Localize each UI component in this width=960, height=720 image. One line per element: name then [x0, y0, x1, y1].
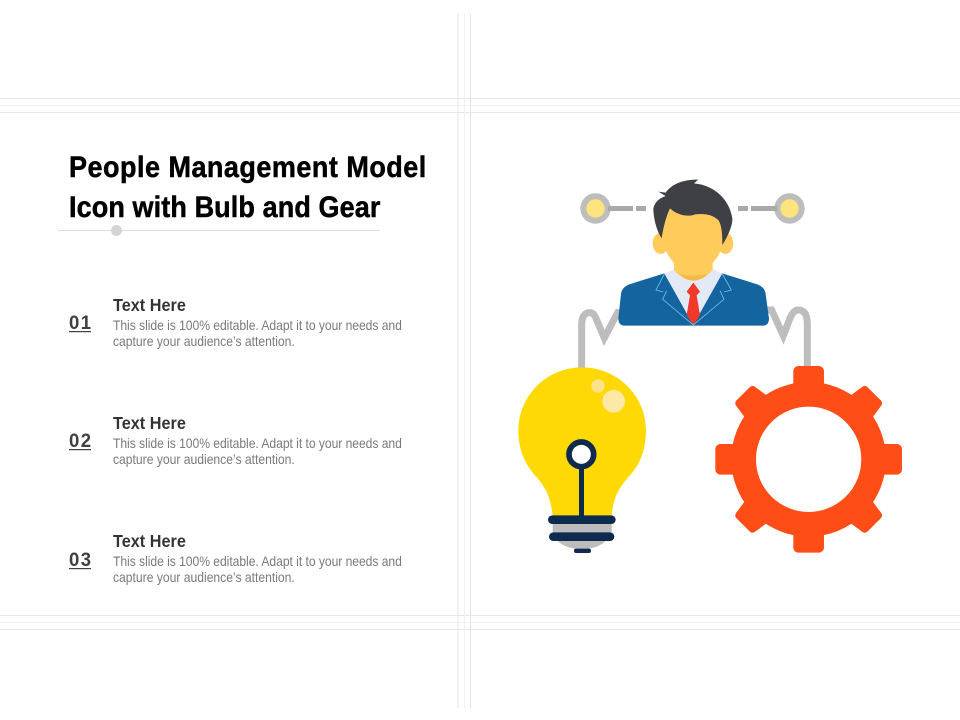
list item 03: This slide is 100% editable. Adapt it to your needs and	[113, 553, 402, 569]
list item 01: Text Here	[113, 295, 186, 315]
person lapels	[656, 274, 731, 325]
bulb filament	[569, 442, 594, 517]
list item 03	[69, 531, 402, 585]
person suit	[618, 273, 769, 326]
list item 03: 03	[69, 550, 91, 571]
icon: connector left	[582, 313, 622, 370]
title	[69, 151, 426, 224]
title divider with dot	[58, 225, 380, 236]
icon: gear	[715, 366, 902, 553]
icon: left node with dashes	[583, 196, 646, 221]
person shirt	[665, 269, 722, 325]
list item 02	[69, 413, 402, 467]
list item 03: Text Here	[113, 531, 186, 551]
list item 02: capture your audience’s attention.	[113, 451, 295, 467]
list item 02: This slide is 100% editable. Adapt it to your needs and	[113, 435, 402, 451]
bulb base	[548, 515, 616, 553]
list item 01: This slide is 100% editable. Adapt it to your needs and	[113, 317, 402, 333]
icon: light bulb	[518, 367, 646, 553]
person chin shadow	[679, 274, 707, 281]
list item 02: Text Here	[113, 413, 186, 433]
person face	[663, 203, 724, 273]
title: Icon with Bulb and Gear	[69, 191, 380, 224]
bulb highlights	[591, 379, 625, 413]
list item 02: 02	[69, 431, 91, 452]
icon: connector right	[765, 310, 807, 370]
person ears	[653, 233, 733, 254]
title: People Management Model	[69, 151, 426, 184]
person hair	[653, 180, 732, 245]
list item 03: capture your audience’s attention.	[113, 569, 295, 585]
icon: person	[618, 180, 769, 326]
person neck	[674, 258, 713, 281]
person tie	[687, 283, 700, 325]
list item 01: 01	[69, 313, 91, 334]
icon: right node with dashes	[738, 196, 802, 221]
list item 01	[69, 295, 402, 349]
bulb glass	[518, 367, 646, 517]
list item 01: capture your audience’s attention.	[113, 333, 295, 349]
